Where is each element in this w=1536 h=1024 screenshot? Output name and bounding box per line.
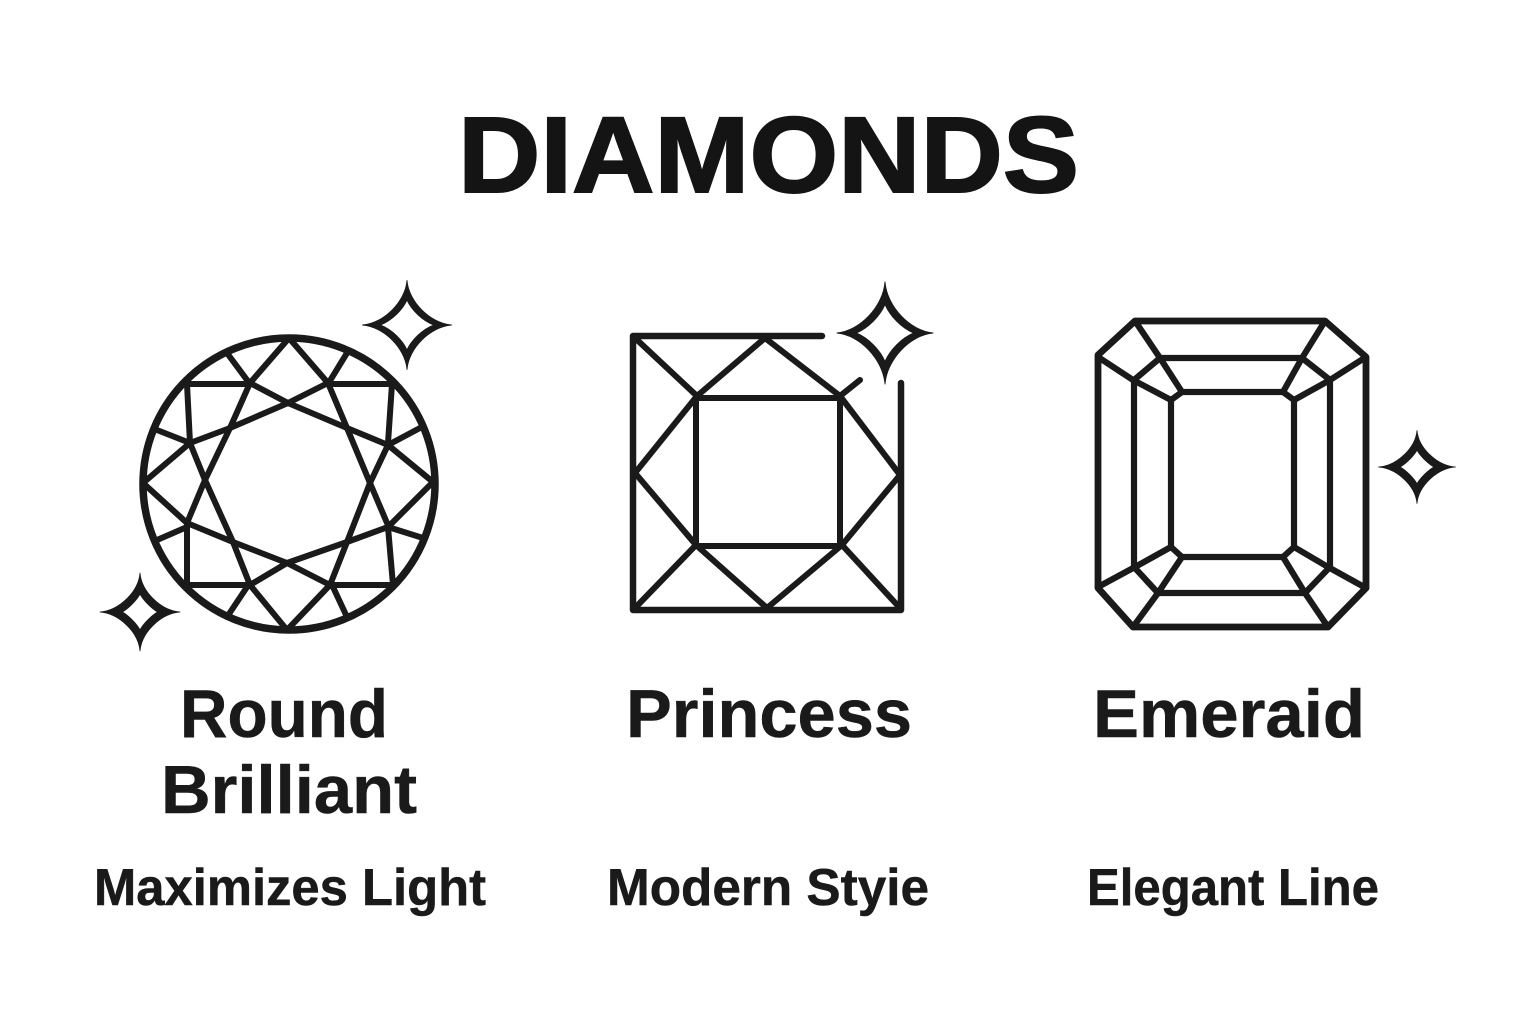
icon: emerald diamond	[1098, 321, 1366, 627]
icon: sparkle of princess	[837, 282, 933, 384]
title: DIAMONDS	[458, 94, 1079, 215]
caption: emerald: Elegant Line	[1087, 859, 1379, 917]
icon: sparkle top right of round	[362, 280, 452, 370]
icon: round brilliant diamond	[143, 338, 435, 630]
label: round brilliant: Round	[180, 676, 388, 752]
icon: sparkle of emerald	[1378, 430, 1456, 504]
icon: sparkle bottom left of round	[100, 573, 180, 651]
label: round brilliant: Brilliant	[161, 752, 417, 828]
caption: princess: Modern Styie	[607, 859, 929, 917]
label: round brilliant	[161, 676, 417, 828]
label: emerald: Emeraid	[1093, 676, 1365, 752]
label: princess: Princess	[626, 676, 912, 752]
caption: round brilliant: Maximizes Light	[94, 859, 486, 917]
icon: princess diamond	[633, 336, 901, 610]
